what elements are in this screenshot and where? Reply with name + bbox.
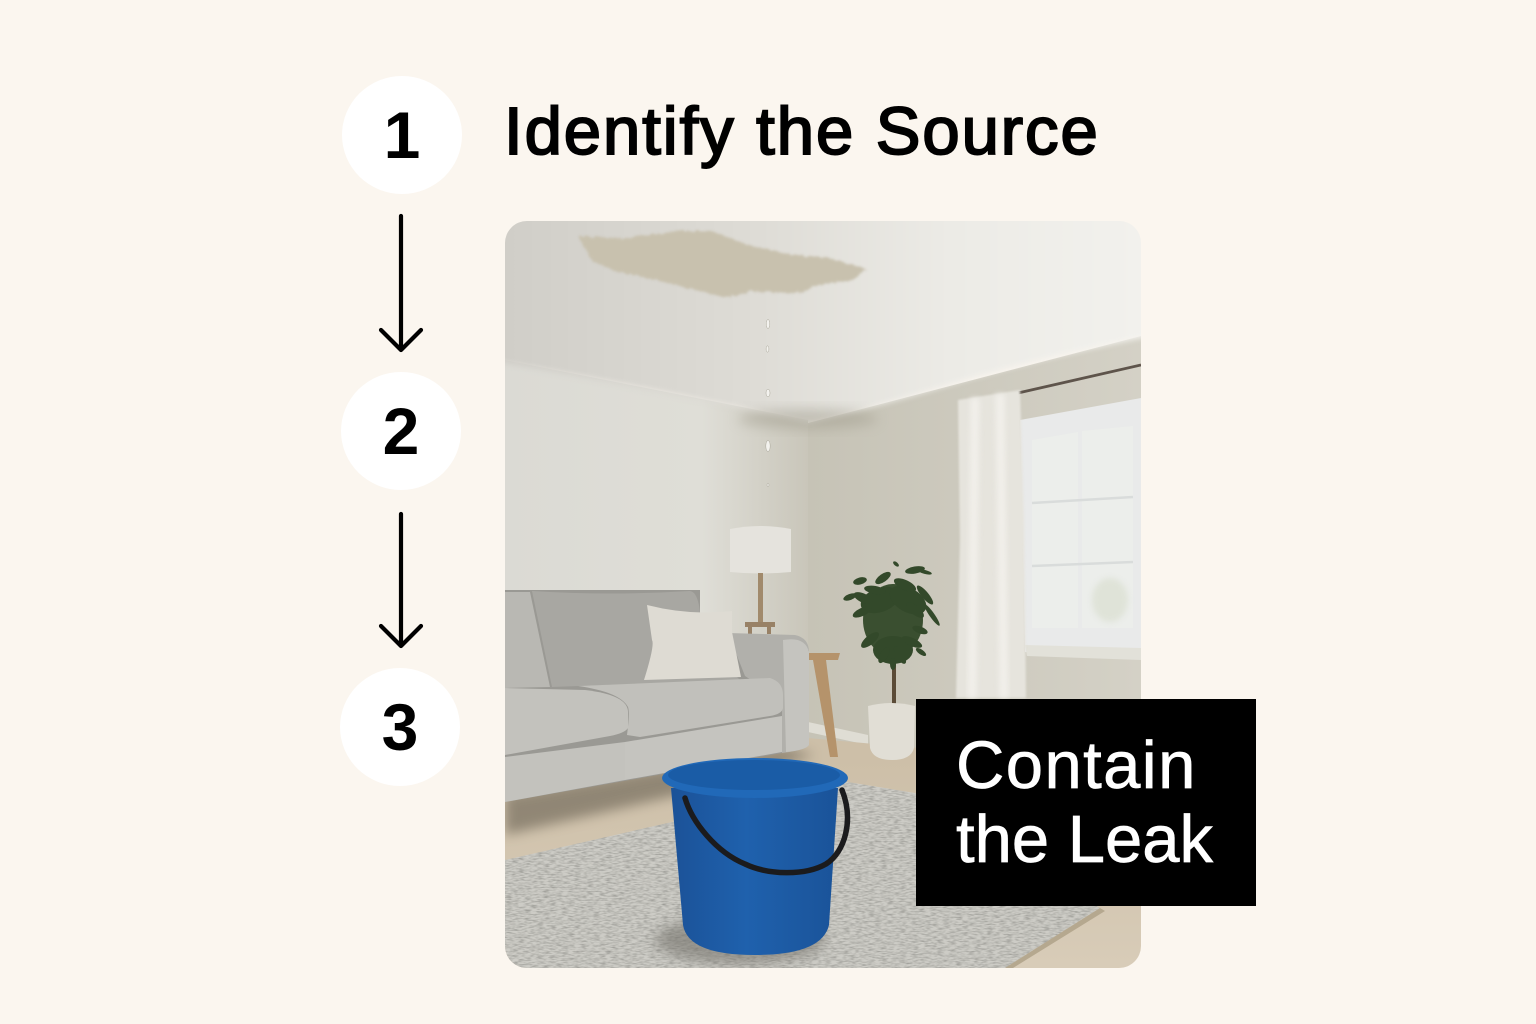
- bucket handle: [685, 790, 847, 873]
- step 1 number badge: 1: [384, 98, 420, 172]
- step 1 number badge: [342, 76, 462, 194]
- grey rug: [505, 782, 1105, 968]
- side table: [806, 653, 840, 757]
- callout text: the Leak: [956, 802, 1213, 877]
- arrow from step 1 to step 2: [378, 214, 424, 352]
- right wall: [808, 336, 1141, 770]
- baseboard: [808, 722, 868, 745]
- water drops: [766, 320, 770, 486]
- ceiling: [505, 221, 1141, 423]
- shadow under sofa: [505, 748, 815, 835]
- curtain rod: [1018, 365, 1141, 393]
- illustration: living room with ceiling leak and bucket: [505, 221, 1141, 968]
- heading: step 1 title: Identify the Source: [504, 94, 1100, 169]
- step 2 number badge: 2: [383, 394, 419, 468]
- window: [1020, 398, 1141, 660]
- callout: step 2 label: [916, 699, 1256, 906]
- sofa: [505, 590, 809, 802]
- ceiling corner shadow: [738, 409, 878, 429]
- water stain on ceiling: [578, 231, 866, 298]
- potted plant: [842, 560, 942, 760]
- table lamp: [730, 526, 791, 634]
- callout text: [956, 728, 1214, 877]
- step 3 number badge: 3: [382, 690, 418, 764]
- cream throw pillow: [644, 605, 741, 680]
- left wall: [505, 362, 808, 645]
- sheer curtain: [956, 390, 1026, 698]
- step 3 number badge: [340, 668, 460, 786]
- wood floor: [505, 738, 1141, 968]
- blue bucket: [655, 758, 848, 964]
- step 2 number badge: [341, 372, 461, 490]
- arrow from step 2 to step 3: [378, 512, 424, 648]
- callout text: Contain: [956, 728, 1197, 803]
